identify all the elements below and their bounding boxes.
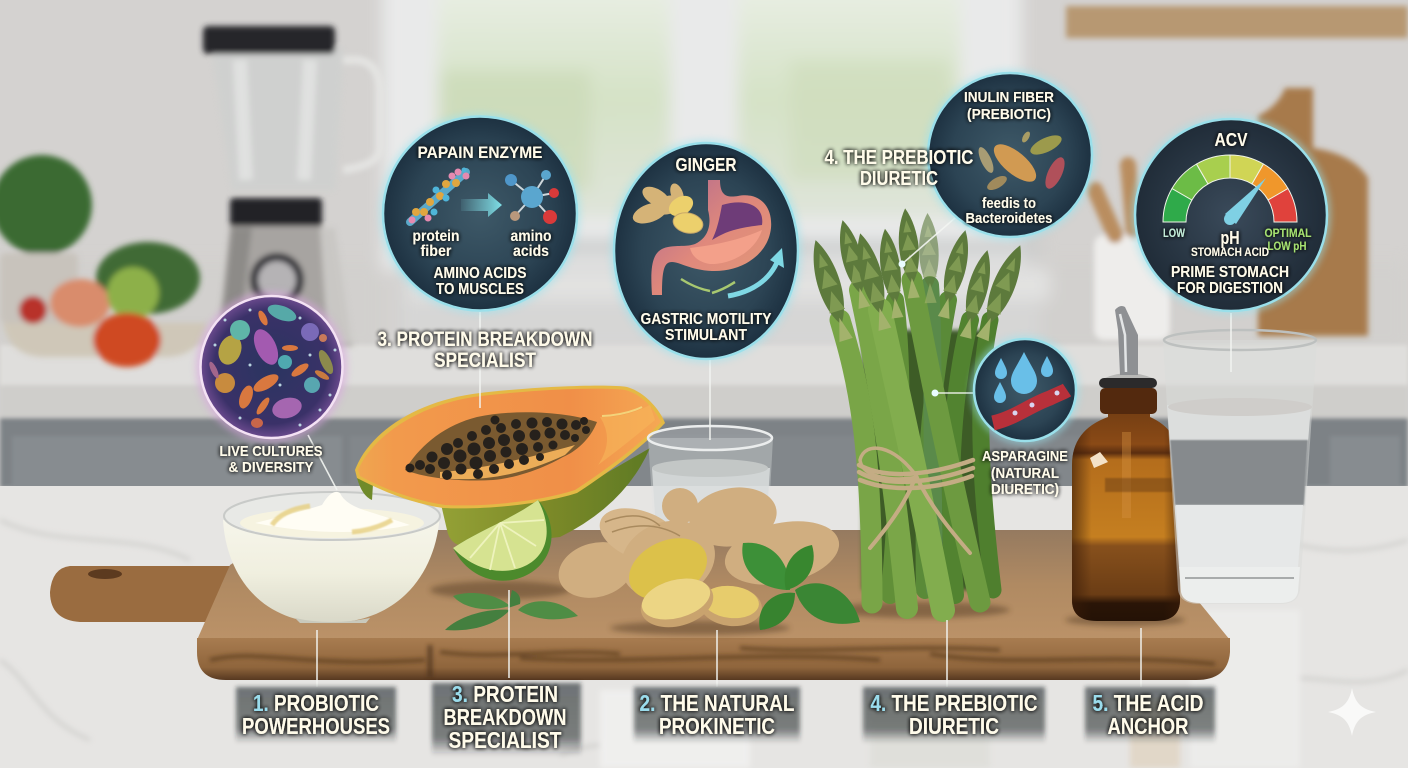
callout: asparagine	[970, 335, 1080, 445]
label: 1. probiotic powerhouses	[236, 687, 396, 743]
label: 1. probiotic powerhouses: POWERHOUSES	[242, 713, 390, 739]
small glass of water	[648, 426, 773, 530]
label: 3. protein breakdown specialist: BREAKDOWN	[444, 704, 566, 730]
heading: 4. the prebiotic diuretic: 4. THE PREBIOTIC	[824, 147, 974, 169]
callout: inulin fiber	[924, 69, 1096, 241]
blender	[203, 26, 380, 346]
text: asparagine: ASPARAGINE	[982, 448, 1068, 465]
gauge	[1163, 155, 1297, 222]
text: gauge: ACV	[1214, 130, 1248, 150]
asparagus bundle	[805, 207, 1030, 610]
potted herbs and fruit bowl	[0, 155, 207, 367]
heading: 3. protein breakdown specialist	[378, 328, 592, 372]
label: 4. the prebiotic diuretic: 4. THE PREBIOTIC	[870, 690, 1038, 716]
callout: papain enzyme	[379, 112, 581, 314]
text: asparagine: (NATURAL	[991, 465, 1059, 482]
yogurt bowl	[223, 492, 440, 623]
water drops and vessel	[993, 352, 1067, 423]
motility arrow	[681, 248, 784, 296]
text: gauge: pH	[1220, 228, 1240, 248]
glass of water	[1163, 330, 1317, 604]
heading: 3. protein breakdown specialist: SPECIALIST	[434, 349, 536, 372]
callout: ginger	[610, 139, 802, 363]
label: 4. the prebiotic diuretic	[863, 687, 1045, 743]
spear tips	[805, 207, 1030, 343]
lime wedge	[453, 500, 552, 581]
text: live cultures: LIVE CULTURES	[220, 443, 322, 460]
object shadows on board	[430, 581, 1185, 635]
text: papain: acids	[513, 243, 549, 260]
needle	[1224, 178, 1266, 225]
label: 2. the natural prokinetic: 2. THE NATURAL	[640, 690, 794, 716]
molecule	[505, 170, 559, 224]
amber ACV bottle	[1072, 306, 1180, 621]
text: ginger	[640, 155, 772, 344]
stomach illustration	[651, 180, 771, 295]
text: gauge: LOW	[1163, 226, 1186, 240]
microbes illustration	[207, 301, 336, 428]
text: live cultures: & DIVERSITY	[228, 459, 314, 476]
text: ginger: GASTRIC MOTILITY	[640, 311, 772, 328]
text: papain: amino	[510, 228, 552, 245]
text: inulin	[964, 89, 1054, 227]
text: gauge: FOR DIGESTION	[1177, 280, 1283, 297]
text: papain	[412, 143, 552, 298]
protein strand	[408, 168, 470, 224]
label: 3. protein breakdown specialist	[432, 681, 581, 756]
text: gauge	[1163, 130, 1312, 297]
connector lines	[308, 218, 1231, 687]
text: inulin: (PREBIOTIC)	[967, 106, 1051, 123]
callout: ACV pH gauge	[1131, 115, 1331, 315]
ginger icon	[630, 182, 705, 236]
label: 3. protein breakdown specialist: 3. PROTEIN	[452, 681, 558, 707]
label: 2. the natural prokinetic	[634, 687, 800, 743]
text: papain: TO MUSCLES	[436, 281, 524, 298]
shelf	[1066, 6, 1408, 38]
cutting board in background	[1258, 88, 1368, 336]
text: asparagine	[982, 448, 1068, 498]
papaya seeds	[406, 416, 590, 480]
heading: 4. the prebiotic diuretic: DIURETIC	[860, 168, 938, 190]
text: gauge: LOW pH	[1268, 239, 1306, 253]
label: 2. the natural prokinetic: PROKINETIC	[659, 713, 775, 739]
text: gauge: STOMACH ACID	[1191, 245, 1269, 259]
arrow	[461, 193, 502, 217]
label: 1. probiotic powerhouses: 1. PROBIOTIC	[253, 690, 379, 716]
text: ginger: STIMULANT	[665, 327, 747, 344]
label: 5. the acid anchor	[1085, 687, 1215, 743]
cutting board	[50, 530, 1230, 680]
bacteria illustration	[976, 130, 1069, 193]
text: ginger: GINGER	[676, 155, 736, 175]
text: gauge: PRIME STOMACH	[1171, 264, 1289, 281]
text: papain: PAPAIN ENZYME	[418, 143, 542, 162]
label: 4. the prebiotic diuretic: DIURETIC	[909, 713, 999, 739]
text: asparagine: DIURETIC)	[991, 481, 1059, 498]
text: gauge: OPTIMAL	[1264, 226, 1312, 240]
label: 5. the acid anchor: 5. THE ACID	[1092, 690, 1204, 716]
utensil jar	[1094, 165, 1170, 340]
mint sprig	[742, 543, 860, 630]
twine	[859, 448, 973, 553]
mint leaves under papaya	[445, 590, 578, 630]
text: inulin: Bacteroidetes	[966, 211, 1052, 227]
text: papain: AMINO ACIDS	[434, 265, 526, 282]
heading: 4. the prebiotic diuretic	[824, 147, 974, 190]
marker dots	[898, 260, 938, 396]
bundle shadow	[862, 330, 985, 590]
text: papain: protein	[412, 228, 460, 245]
text: papain: fiber	[420, 243, 452, 260]
text: live cultures	[220, 443, 322, 476]
papaya	[355, 386, 665, 547]
label: 5. the acid anchor: ANCHOR	[1108, 713, 1189, 739]
icon: sparkle watermark	[1328, 688, 1376, 736]
callout: live cultures	[196, 291, 348, 476]
text: inulin: feedis to	[982, 196, 1036, 212]
stems	[840, 280, 993, 610]
label: 3. protein breakdown specialist: SPECIALIST	[448, 727, 562, 753]
heading: 3. protein breakdown specialist: 3. PROTEIN BREAKDOWN	[378, 328, 592, 351]
text: inulin: INULIN FIBER	[964, 89, 1054, 106]
ginger root	[552, 481, 845, 635]
